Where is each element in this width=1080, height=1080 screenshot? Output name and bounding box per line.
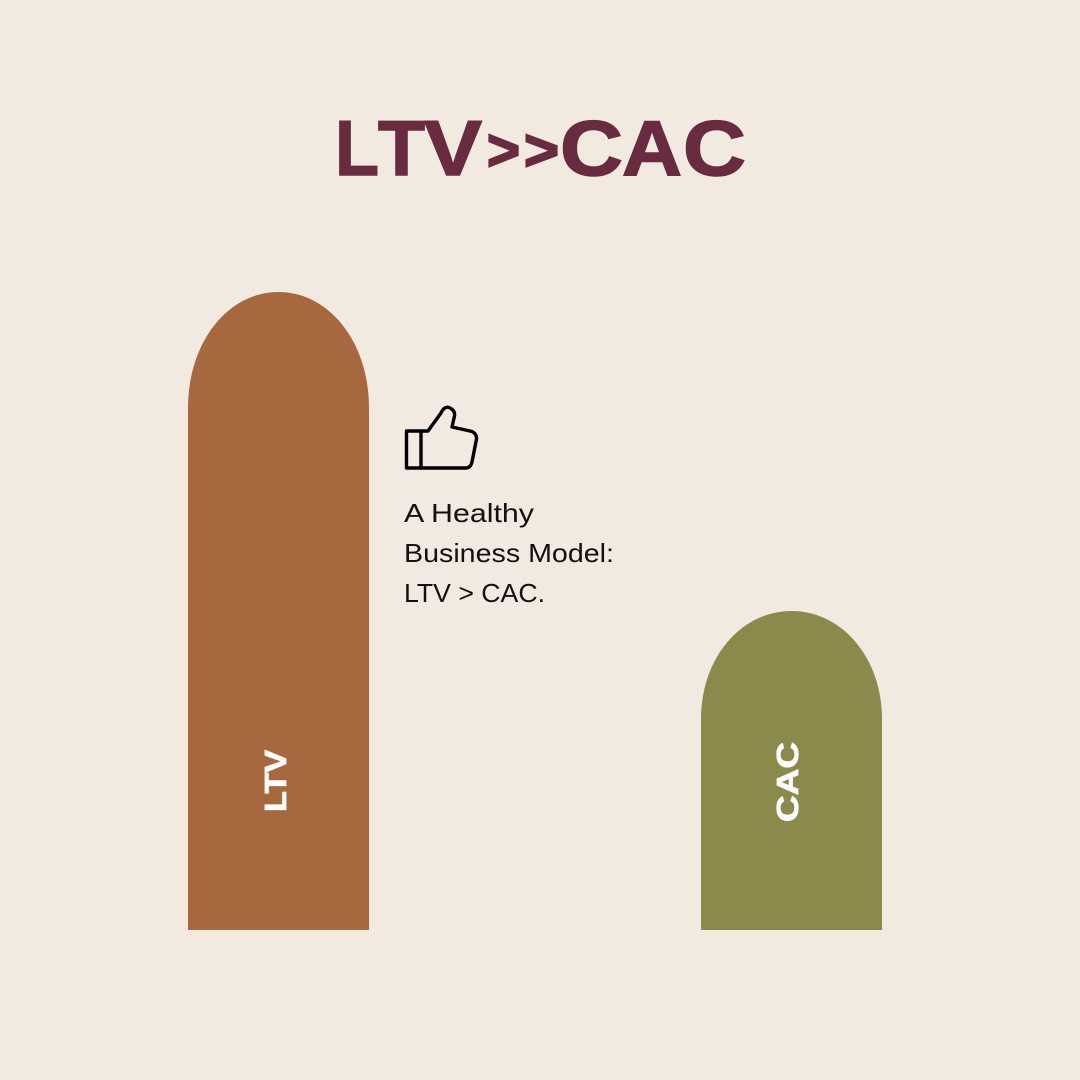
- title: A: [622, 104, 682, 192]
- title: C: [560, 104, 623, 192]
- title: L: [335, 104, 379, 192]
- title: >: [524, 118, 559, 183]
- text block: Business Model:: [404, 538, 614, 568]
- title: V: [424, 104, 482, 192]
- label: CAC: CAC: [770, 742, 805, 822]
- title: C: [683, 104, 746, 192]
- label: LTV: LTV: [258, 750, 293, 812]
- icon: thumbs up: [406, 407, 477, 468]
- text block: A Healthy: [404, 498, 534, 528]
- title: T: [378, 104, 425, 192]
- title: >: [487, 118, 520, 183]
- bar: LTV: [188, 292, 369, 930]
- text block: LTV > CAC.: [404, 578, 545, 608]
- bar: CAC: [701, 611, 882, 930]
- title: [335, 104, 746, 192]
- text block: [404, 498, 614, 608]
